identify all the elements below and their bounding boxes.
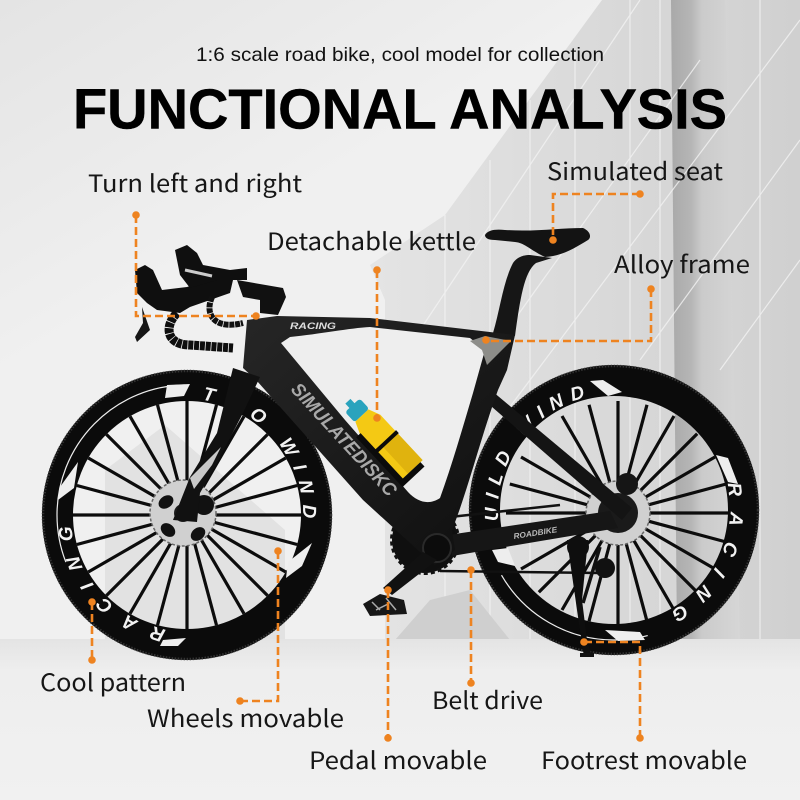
fork: [173, 368, 260, 522]
label: Belt drive: [432, 566, 543, 716]
label: Wheels movable: Wheels movable: [147, 699, 344, 734]
label: Turn left and right: [88, 164, 302, 320]
label: Footrest movable: Footrest movable: [541, 741, 747, 776]
label: Pedal movable: [309, 586, 487, 776]
label: Pedal movable: Pedal movable: [309, 741, 487, 776]
rim decals: UILD WIND: [484, 386, 584, 520]
bottom bracket: [423, 534, 451, 562]
label: Simulated seat: [547, 152, 723, 244]
rear derailleur and kickstand: [567, 536, 615, 657]
rim decals: [58, 384, 316, 646]
seat post: [493, 255, 552, 336]
spokes: [73, 401, 301, 629]
main frame: [243, 316, 515, 565]
title: FUNCTIONAL ANALYSIS: [73, 78, 727, 142]
frame opening: [281, 327, 485, 502]
label: Alloy frame: [482, 245, 750, 344]
disc brake rotor: [586, 473, 650, 545]
chain stay and seat stay: [448, 511, 618, 556]
seat cluster: [470, 336, 511, 365]
bike frame: [173, 255, 632, 565]
disc brake rotor: [150, 480, 216, 546]
label: Cool pattern: [40, 598, 186, 698]
label: Detachable kettle: Detachable kettle: [267, 222, 476, 257]
chain stay text: ROADBIKE: [513, 525, 558, 541]
rim decals: RACING: [58, 527, 166, 642]
rim decals: TWO WIND: [205, 387, 316, 518]
label: Alloy frame: Alloy frame: [614, 245, 750, 280]
front wheel: [42, 370, 332, 660]
spokes: [506, 401, 730, 625]
subtitle: 1:6 scale road bike, cool model for collection: [196, 44, 604, 66]
rear wheel: [468, 364, 760, 656]
water bottle and cage: [337, 391, 425, 483]
rim decals: RACING: [672, 484, 743, 621]
label: Footrest movable: [541, 638, 747, 776]
label: Belt drive: Belt drive: [432, 681, 543, 716]
crank arm and pedal: [363, 552, 437, 616]
label: Wheels movable: [147, 547, 344, 734]
top tube text: RACING: [290, 321, 336, 331]
label: Simulated seat: Simulated seat: [547, 152, 723, 187]
down tube text: SIMULATEDISKC: [286, 379, 401, 501]
rim decals: [484, 380, 743, 641]
handlebar: [135, 245, 286, 348]
saddle: [485, 228, 590, 257]
label: Detachable kettle: [267, 222, 476, 422]
label: Cool pattern: Cool pattern: [40, 663, 186, 698]
drivetrain: chainring and chain: [392, 505, 600, 573]
label: Turn left and right: Turn left and right: [88, 164, 302, 199]
